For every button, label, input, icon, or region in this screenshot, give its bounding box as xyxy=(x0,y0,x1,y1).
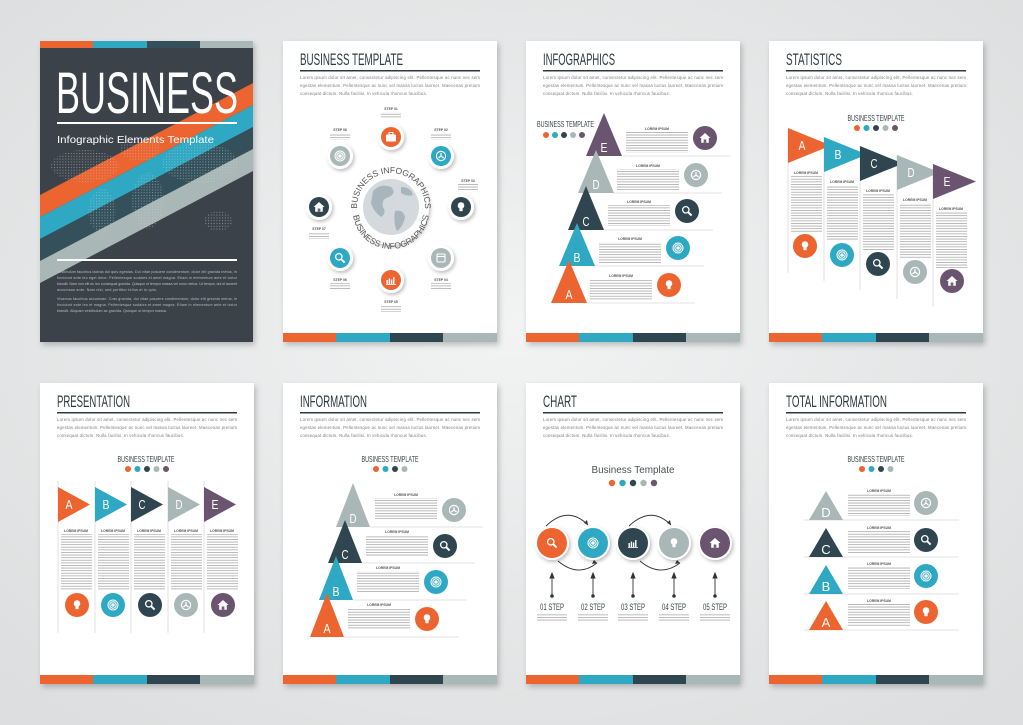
flags: E xyxy=(944,174,951,189)
bottom bar xyxy=(526,333,740,342)
triangle rows xyxy=(804,491,959,630)
panel: total information xyxy=(769,383,983,684)
flags: C xyxy=(870,156,878,171)
pyramid steps: C xyxy=(582,214,590,229)
text blocks: LOREM IPSUM xyxy=(609,274,633,278)
text blocks xyxy=(348,493,437,629)
column text: LOREM IPSUM xyxy=(174,529,198,533)
intro text xyxy=(786,75,966,96)
flags: A xyxy=(798,138,806,153)
intro text: Lorem ipsum dolor sit amet, consectetur adipiscing elit. Pellentesque ac nunc nec sem xyxy=(300,417,480,422)
pyramid steps: A xyxy=(324,621,331,636)
column separators xyxy=(58,481,204,633)
column text xyxy=(791,171,967,268)
column text: LOREM IPSUM xyxy=(830,180,854,184)
text blocks: LOREM IPSUM xyxy=(385,530,409,534)
icon ring xyxy=(306,124,474,293)
flags: B xyxy=(834,147,842,162)
bottom bar xyxy=(40,675,254,684)
business template label: BUSINESS TEMPLATE xyxy=(118,455,174,464)
bottom bar xyxy=(283,333,497,342)
column text: LOREM IPSUM xyxy=(101,529,125,533)
heading: CHART xyxy=(543,392,577,411)
intro text: Lorem ipsum dolor sit amet, consectetur adipiscing elit. Pellentesque ac nunc nec sem xyxy=(300,75,480,80)
bottom bar xyxy=(769,675,983,684)
step labels: STEP 01 xyxy=(384,107,398,111)
intro text xyxy=(57,417,237,438)
intro text: consequat dictum. Nulla facilisi. In vehicula rhoncus faucibus. xyxy=(786,91,913,96)
pyramid steps: C xyxy=(342,547,348,562)
step labels: 01 STEP xyxy=(540,602,564,613)
step labels: STEP 07 xyxy=(312,227,326,231)
business template label xyxy=(537,120,594,138)
heading: INFOGRAPHICS xyxy=(543,50,615,69)
intro text: consequat dictum. Nulla facilisi. In vehicula rhoncus faucibus. xyxy=(300,433,427,438)
business template label: BUSINESS TEMPLATE xyxy=(848,455,904,464)
icons xyxy=(657,126,717,297)
panel: business template xyxy=(282,41,502,348)
flags: B xyxy=(102,497,110,512)
heading: BUSINESS TEMPLATE xyxy=(300,50,403,69)
intro text: consequat dictum. Nulla facilisi. In vehicula rhoncus faucibus. xyxy=(786,433,913,438)
bottom bar xyxy=(526,675,740,684)
step labels: STEP 02 xyxy=(434,128,448,132)
panel: statistics xyxy=(769,41,983,342)
intro text xyxy=(543,75,723,96)
cover title: BUSINESS xyxy=(56,61,238,126)
icons xyxy=(793,234,964,293)
text blocks: LOREM IPSUM xyxy=(645,127,669,131)
text blocks: LOREM IPSUM xyxy=(367,603,391,607)
text blocks: LOREM IPSUM xyxy=(867,526,891,530)
flags: A xyxy=(66,497,73,512)
text blocks: LOREM IPSUM xyxy=(627,200,651,204)
intro text: consequat dictum. Nulla facilisi. In vehicula rhoncus faucibus. xyxy=(543,433,670,438)
triangle rows: A xyxy=(822,615,831,630)
pyramid steps xyxy=(310,483,483,637)
column separators xyxy=(788,128,933,307)
panel: presentation xyxy=(40,383,254,684)
text blocks: LOREM IPSUM xyxy=(867,489,891,493)
intro text: egestas elementum. Pellentesque ac nunc vel massa luctus laoreet. Maecenas pretium xyxy=(57,425,237,430)
intro text: Lorem ipsum dolor sit amet, consectetur adipiscing elit. Pellentesque ac nunc nec sem xyxy=(543,75,723,80)
intro text: consequat dictum. Nulla facilisi. In vehicula rhoncus faucibus. xyxy=(300,91,427,96)
column text: LOREM IPSUM xyxy=(939,207,963,211)
cover paragraph: Vestibulum faucibus lacinia dui quis egestas. Dui vitae posuere condimentum, dolor elit gravida metus, in xyxy=(57,270,237,274)
flags xyxy=(788,128,976,199)
panel: information xyxy=(283,383,497,684)
step labels: 03 STEP xyxy=(621,602,645,613)
intro text: egestas elementum. Pellentesque ac nunc vel massa luctus laoreet. Maecenas pretium xyxy=(786,83,966,88)
business template label xyxy=(848,455,904,472)
column text: LOREM IPSUM xyxy=(866,189,890,193)
icons xyxy=(65,593,235,617)
step labels xyxy=(540,602,727,613)
text blocks: LOREM IPSUM xyxy=(376,566,400,570)
pyramid steps xyxy=(551,113,731,303)
triangle rows: C xyxy=(821,542,831,557)
flags xyxy=(58,487,236,522)
heading: PRESENTATION xyxy=(57,392,130,411)
intro text xyxy=(300,417,480,438)
flags: C xyxy=(138,497,146,512)
intro text: Lorem ipsum dolor sit amet, consectetur adipiscing elit. Pellentesque ac nunc nec sem xyxy=(786,75,966,80)
text blocks xyxy=(848,489,910,626)
step labels xyxy=(309,107,478,312)
text blocks: LOREM IPSUM xyxy=(618,237,642,241)
intro text xyxy=(786,417,966,438)
cover paragraph: Vivamus faucibus accumsan. Cras gravida, dui vitae posuere condimentum, dolor elit gravida metus, in xyxy=(57,297,237,301)
business template label: BUSINESS TEMPLATE xyxy=(537,120,594,129)
step labels: 05 STEP xyxy=(703,602,727,613)
business template label: Business Template xyxy=(592,465,675,476)
business template label xyxy=(362,455,418,472)
globe: BUSINESS INFOGRAPHICS xyxy=(351,167,431,208)
pyramid steps: D xyxy=(592,177,600,192)
cover paragraph: blandit. Aliquam vestibulum ac gravida. Quisque ut tempor massa. xyxy=(57,309,167,313)
flow arrows xyxy=(546,515,680,570)
intro text: consequat dictum. Nulla facilisi. In vehicula rhoncus faucibus. xyxy=(543,91,670,96)
text blocks: LOREM IPSUM xyxy=(867,599,891,603)
pyramid steps: D xyxy=(350,511,356,526)
text blocks: LOREM IPSUM xyxy=(394,493,418,497)
step labels: 04 STEP xyxy=(662,602,686,613)
heading: TOTAL INFORMATION xyxy=(786,392,887,411)
globe xyxy=(351,167,432,250)
intro text: egestas elementum. Pellentesque ac nunc vel massa luctus laoreet. Maecenas pretium xyxy=(543,425,723,430)
cover paragraph: tincidunt ante leo eget dolor. Pellentesque sodales et amet magna. Etiam in elementum ante et tortor xyxy=(57,276,238,280)
step labels: STEP 04 xyxy=(434,278,448,282)
triangle rows: D xyxy=(821,505,831,520)
cover paragraph: blandit. Nam non elit eu leo consequat gravida. Quisque ut tempor massa vel nunc metus. Ut tempor, dui et laoreet xyxy=(57,282,237,286)
intro text xyxy=(543,417,723,438)
pyramid steps: E xyxy=(600,140,608,155)
intro text: egestas elementum. Pellentesque ac nunc vel massa luctus laoreet. Maecenas pretium xyxy=(300,83,480,88)
bottom bar xyxy=(283,675,497,684)
heading: INFORMATION xyxy=(300,392,367,411)
flags: D xyxy=(176,497,182,512)
business template label xyxy=(592,465,675,486)
intro text: egestas elementum. Pellentesque ac nunc vel massa luctus laoreet. Maecenas pretium xyxy=(786,425,966,430)
bottom bar xyxy=(769,333,983,342)
column text: LOREM IPSUM xyxy=(903,198,927,202)
step circles xyxy=(535,526,732,560)
column text: LOREM IPSUM xyxy=(794,171,818,175)
column text xyxy=(61,529,238,590)
flags: D xyxy=(908,165,914,180)
step pointers xyxy=(550,573,717,597)
triangle rows: B xyxy=(822,579,830,594)
step labels: STEP 08 xyxy=(333,128,347,132)
intro text: Lorem ipsum dolor sit amet, consectetur adipiscing elit. Pellentesque ac nunc nec sem xyxy=(543,417,723,422)
column text: LOREM IPSUM xyxy=(137,529,161,533)
icons xyxy=(914,491,938,624)
globe: BUSINESS INFOGRAPHICS xyxy=(353,215,428,250)
intro text: egestas elementum. Pellentesque ac nunc vel massa luctus laoreet. Maecenas pretium xyxy=(300,425,480,430)
intro text: egestas elementum. Pellentesque ac nunc vel massa luctus laoreet. Maecenas pretium xyxy=(543,83,723,88)
step labels: STEP 06 xyxy=(333,278,347,282)
business template label: BUSINESS TEMPLATE xyxy=(848,114,904,123)
cover paragraph: accumsan ante. Nam nisi, sed porttitor tellus et in quis. xyxy=(57,288,157,292)
step labels: 02 STEP xyxy=(581,602,605,613)
diagonal stripes xyxy=(40,83,253,283)
intro text: Lorem ipsum dolor sit amet, consectetur adipiscing elit. Pellentesque ac nunc nec sem xyxy=(786,417,966,422)
cover paragraph: tincidunt ante leo et magna. Pellentesque sodales et amet magna. Etiam in elementum ante et tortor xyxy=(57,303,238,307)
pyramid steps: B xyxy=(332,584,340,599)
text blocks xyxy=(590,127,688,300)
world map dots xyxy=(51,137,238,233)
step labels: STEP 05 xyxy=(384,300,398,304)
text blocks: LOREM IPSUM xyxy=(636,164,660,168)
text blocks: LOREM IPSUM xyxy=(867,562,891,566)
icons xyxy=(415,498,466,631)
heading: STATISTICS xyxy=(786,50,842,69)
pyramid steps: B xyxy=(574,250,580,265)
cover subtitle: Infographic Elements Template xyxy=(57,134,214,146)
intro text: consequat dictum. Nulla facilisi. In vehicula rhoncus faucibus. xyxy=(57,433,184,438)
pyramid steps: A xyxy=(566,287,573,302)
intro text: Lorem ipsum dolor sit amet, consectetur adipiscing elit. Pellentesque ac nunc nec sem xyxy=(57,417,237,422)
business template label xyxy=(848,114,904,131)
business template label: BUSINESS TEMPLATE xyxy=(362,455,418,464)
panel: chart xyxy=(526,383,740,684)
flags: E xyxy=(212,497,219,512)
business template label xyxy=(118,455,174,472)
panel: infographics xyxy=(526,41,740,342)
panel: cover business xyxy=(40,41,253,342)
column text: LOREM IPSUM xyxy=(64,529,88,533)
column text: LOREM IPSUM xyxy=(210,529,234,533)
step labels: STEP 03 xyxy=(461,179,475,183)
top color bar xyxy=(40,41,253,48)
intro text xyxy=(300,75,480,96)
cover paragraph xyxy=(57,270,238,313)
